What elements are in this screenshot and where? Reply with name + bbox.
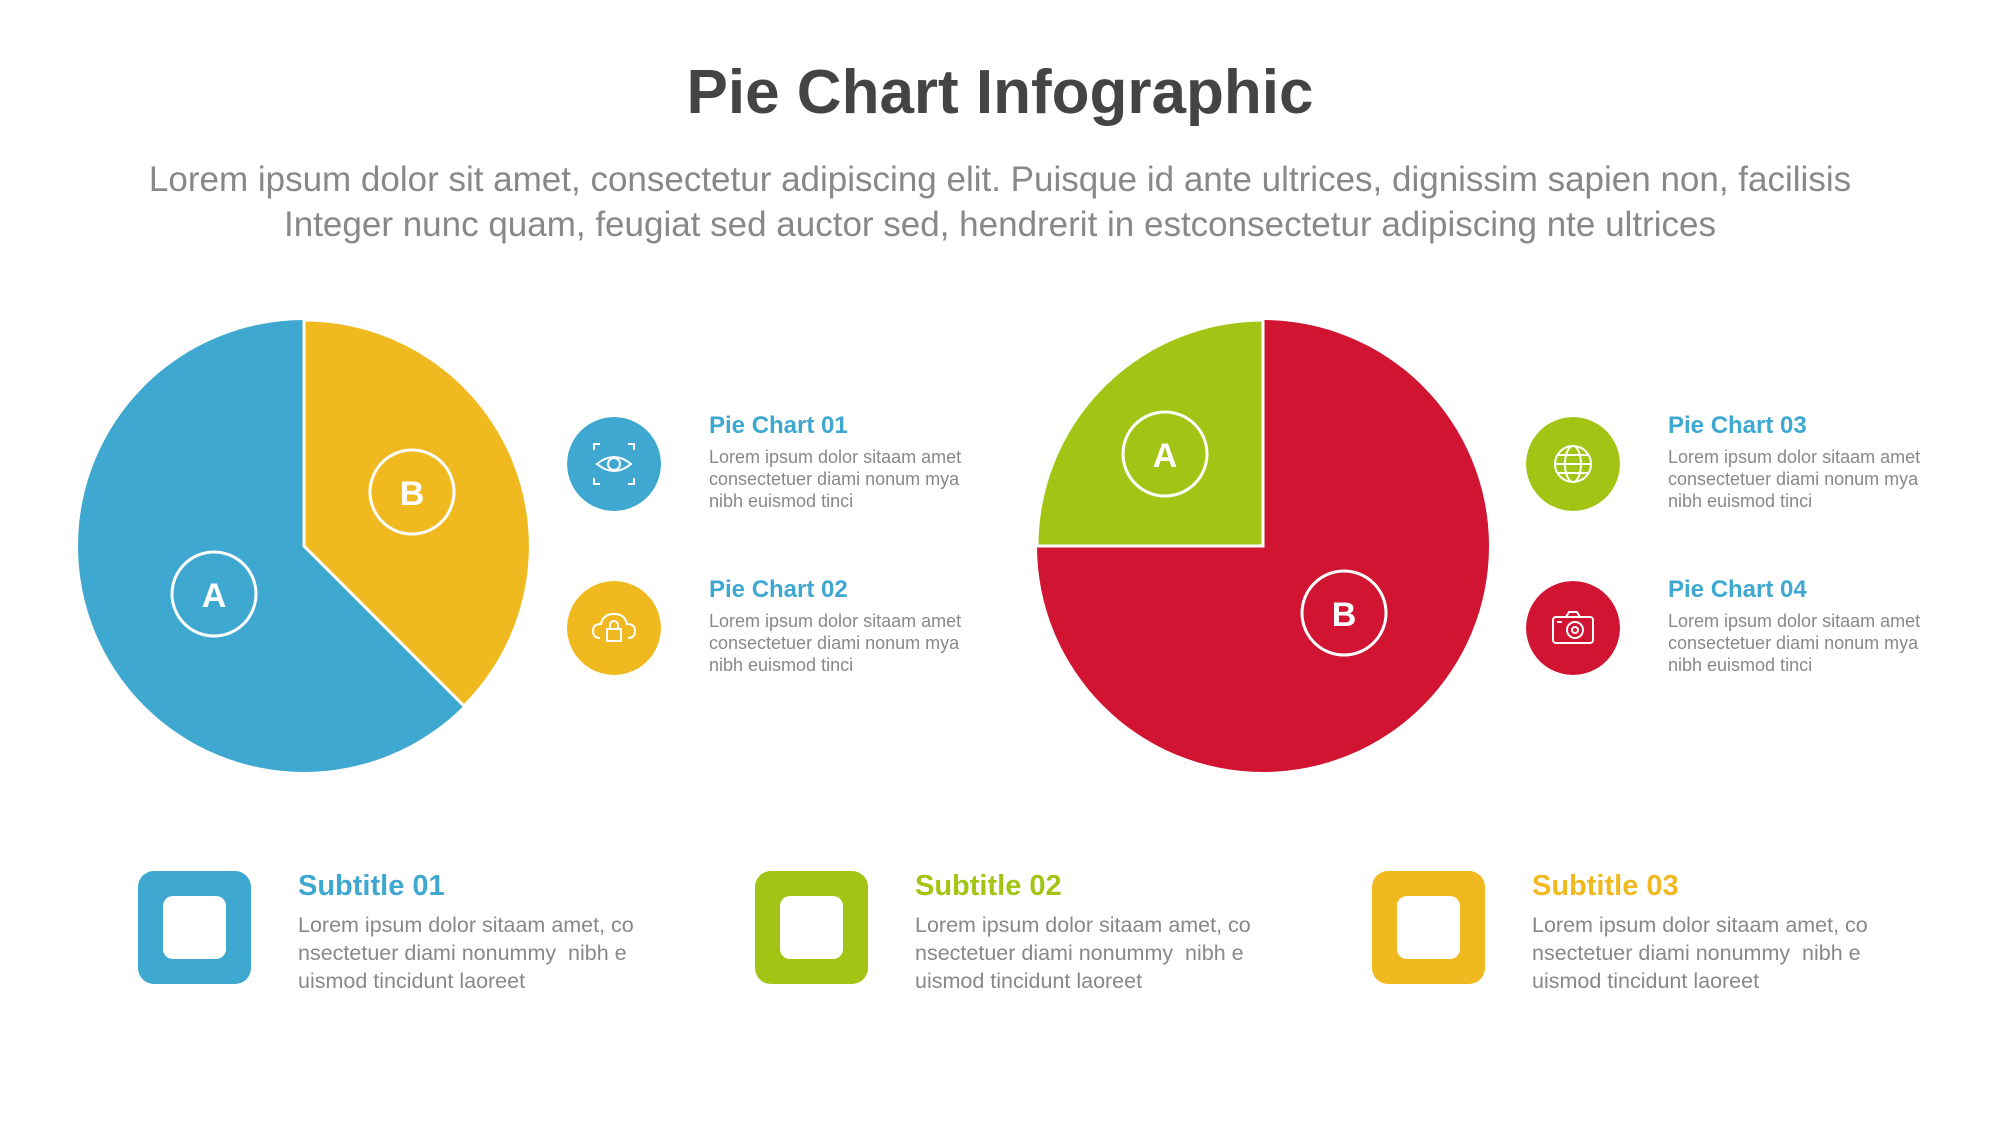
icon: blue square — [138, 871, 251, 984]
subtitle 02 block — [755, 870, 1251, 993]
icon: eye — [567, 417, 661, 511]
text: pie chart 01: consectetuer diami nonum mya — [709, 469, 959, 489]
text: pie chart 03: nibh euismod tinci — [1668, 491, 1812, 511]
text: pie chart 01 — [709, 412, 961, 511]
text: pie chart 03: Pie Chart 03 — [1668, 412, 1807, 439]
text: pie chart 04: consectetuer diami nonum mya — [1668, 633, 1918, 653]
subtitle 02 block: Subtitle 02 — [915, 870, 1062, 902]
text: pie chart 02: Lorem ipsum dolor sitaam amet — [709, 611, 961, 631]
intro text — [149, 160, 1851, 244]
icon: yellow square — [1372, 871, 1485, 984]
text: pie chart 02: nibh euismod tinci — [709, 655, 853, 675]
text: pie chart 01: Lorem ipsum dolor sitaam amet — [709, 447, 961, 467]
text: pie chart 04 — [1668, 576, 1920, 675]
subtitle 01 block: Lorem ipsum dolor sitaam amet, co — [298, 913, 634, 937]
subtitle 03 block — [1372, 870, 1868, 993]
subtitle 02 block: Lorem ipsum dolor sitaam amet, co — [915, 913, 1251, 937]
pie chart right: B — [1332, 596, 1356, 634]
subtitle 01 block: uismod tincidunt laoreet — [298, 969, 525, 993]
text: pie chart 03: Lorem ipsum dolor sitaam amet — [1668, 447, 1920, 467]
subtitle 03 block: nsectetuer diami nonummy nibh e — [1532, 941, 1861, 965]
subtitle 03 block: Subtitle 03 — [1532, 870, 1679, 902]
text: pie chart 03 — [1668, 412, 1920, 511]
subtitle 03 block: Lorem ipsum dolor sitaam amet, co — [1532, 913, 1868, 937]
subtitle 03 block: uismod tincidunt laoreet — [1532, 969, 1759, 993]
icon: globe — [1526, 417, 1620, 511]
subtitle 01 block: Subtitle 01 — [298, 870, 445, 902]
pie chart left: A — [202, 577, 226, 615]
text: pie chart 03: consectetuer diami nonum mya — [1668, 469, 1918, 489]
pie chart right: A — [1153, 437, 1177, 475]
intro text: Lorem ipsum dolor sit amet, consectetur adipiscing elit. Puisque id ante ultrices, dignissim sapien non, facilisis — [149, 160, 1851, 199]
text: pie chart 01: Pie Chart 01 — [709, 412, 848, 439]
text: pie chart 02: consectetuer diami nonum mya — [709, 633, 959, 653]
text: pie chart 02 — [709, 576, 961, 675]
text: pie chart 02: Pie Chart 02 — [709, 576, 848, 603]
title: Pie Chart Infographic — [687, 58, 1313, 127]
pie chart left: B — [400, 475, 424, 513]
text: pie chart 04: nibh euismod tinci — [1668, 655, 1812, 675]
icon: green square — [755, 871, 868, 984]
subtitle 02 block: uismod tincidunt laoreet — [915, 969, 1142, 993]
text: pie chart 04: Lorem ipsum dolor sitaam amet — [1668, 611, 1920, 631]
icon: camera — [1526, 581, 1620, 675]
subtitle 02 block: nsectetuer diami nonummy nibh e — [915, 941, 1244, 965]
text: pie chart 01: nibh euismod tinci — [709, 491, 853, 511]
icon: cloud lock — [567, 581, 661, 675]
subtitle 01 block: nsectetuer diami nonummy nibh e — [298, 941, 627, 965]
intro text: Integer nunc quam, feugiat sed auctor sed, hendrerit in estconsectetur adipiscing nte ultrices — [284, 205, 1716, 244]
subtitle 01 block — [138, 870, 634, 993]
text: pie chart 04: Pie Chart 04 — [1668, 576, 1807, 603]
